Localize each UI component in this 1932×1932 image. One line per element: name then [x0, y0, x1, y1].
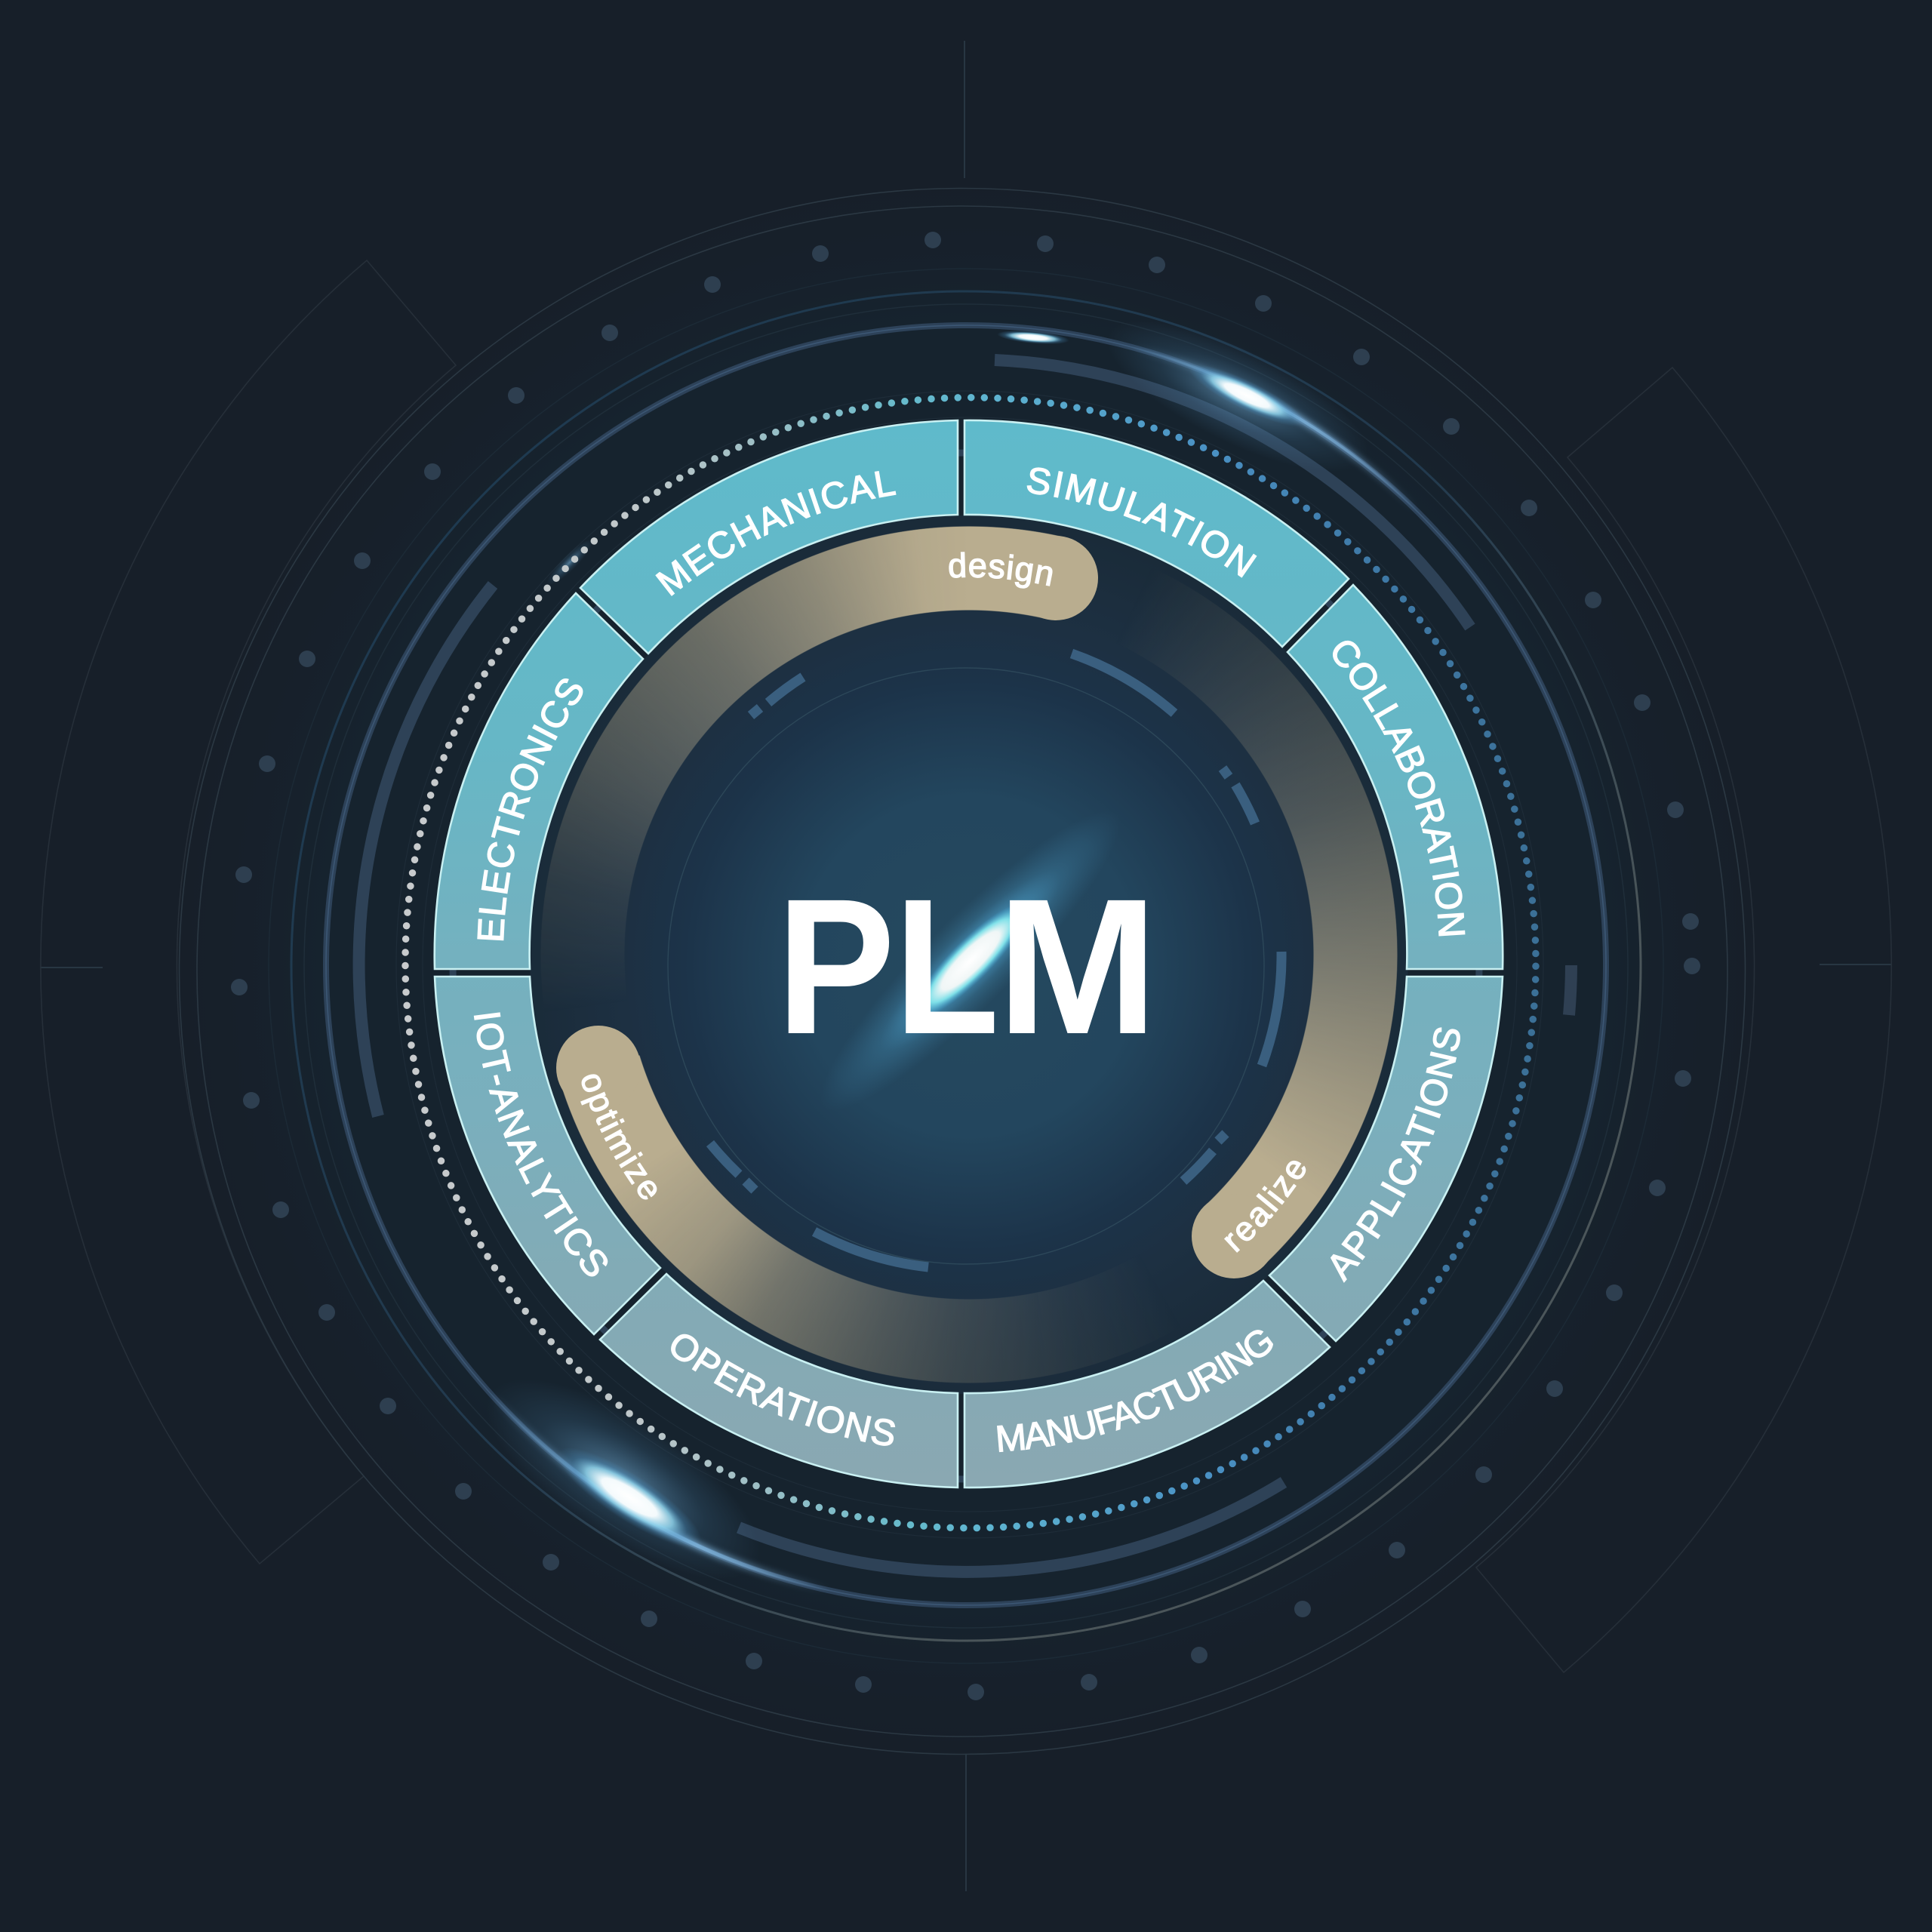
small flare behind dotted ring	[542, 534, 598, 590]
inner dashes	[710, 654, 1281, 1267]
middle rings	[269, 269, 1663, 1663]
title: PLM: L	[894, 860, 999, 1075]
label: mechanical: MECHANICAL	[655, 471, 897, 596]
inner disc ring	[668, 668, 1264, 1264]
label: electronics: ELECTRONICS	[477, 678, 583, 940]
outer wedge frames	[41, 260, 1891, 1672]
title: PLM: M	[997, 859, 1158, 1075]
label: operations: OPERATIONS	[671, 1334, 895, 1446]
center light streak	[793, 783, 1148, 1138]
ring highlights and lens flares	[457, 291, 1419, 1616]
outer marker dots	[231, 232, 1700, 1700]
gap marker ring	[453, 453, 1479, 1479]
segment: operations	[600, 1274, 958, 1487]
segment: mechanical	[580, 420, 958, 654]
segment: applications	[1269, 977, 1503, 1341]
label: manufacturing: MANUFACTURING	[997, 1330, 1273, 1452]
tan process band	[540, 526, 1398, 1383]
label: iot-analytics: IOT-ANALYTICS	[474, 1012, 608, 1277]
segment: iot-analytics	[435, 977, 660, 1334]
label: realize: realize	[1224, 1161, 1306, 1253]
label: simulation: SIMULATION	[1026, 467, 1257, 578]
thick arc segments	[359, 360, 1571, 1572]
main blue ring	[326, 325, 1606, 1605]
label: collaboration: COLLABORATION	[1333, 640, 1466, 936]
title: PLM	[777, 859, 1158, 1075]
segment labels	[474, 467, 1466, 1452]
band end caps	[556, 536, 1276, 1278]
label: applications: APPLICATIONS	[1331, 1027, 1460, 1283]
segment: manufacturing	[964, 1281, 1330, 1487]
label: design: design	[949, 552, 1053, 589]
band labels	[567, 543, 1319, 1262]
dotted ring	[405, 398, 1536, 1528]
segment: electronics	[435, 593, 643, 969]
inner disc	[530, 515, 1408, 1394]
segment: simulation	[964, 420, 1349, 647]
ring segments	[435, 420, 1503, 1487]
label: optimize: optimize	[580, 1074, 657, 1200]
outer thin rings	[180, 189, 1745, 1754]
segment: collaboration	[1287, 585, 1503, 969]
title: PLM: P	[777, 859, 895, 1075]
